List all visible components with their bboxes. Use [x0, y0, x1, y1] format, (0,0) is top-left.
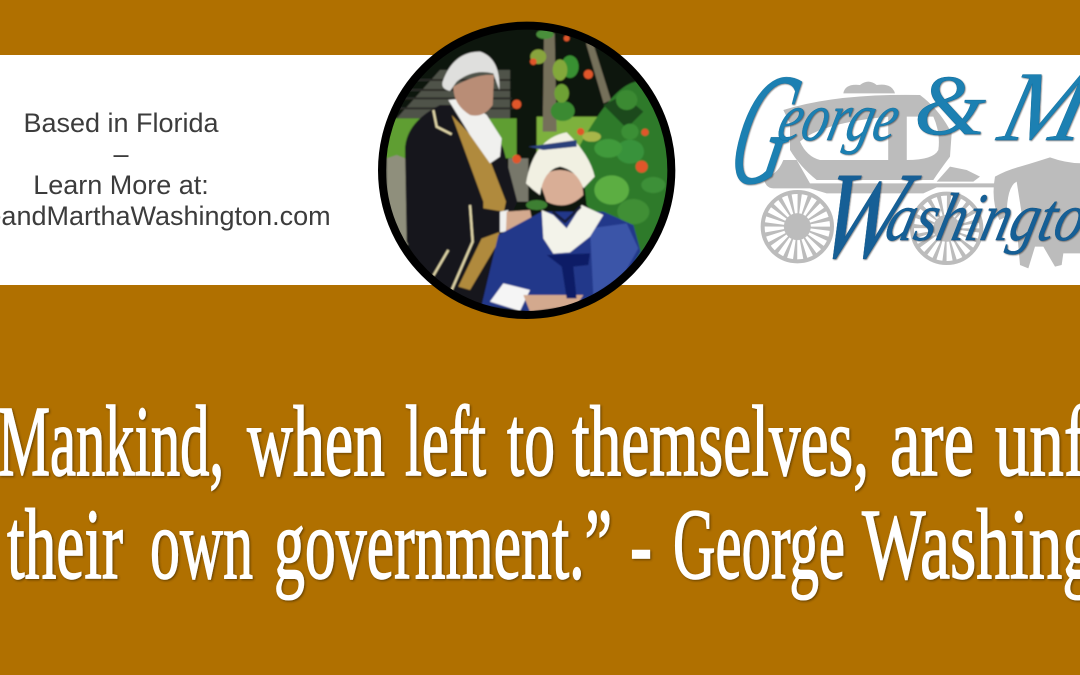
location and website text: Based in Florida: [23, 108, 219, 138]
quote line one: to: [507, 385, 555, 497]
quote line two: George: [673, 488, 845, 600]
logo word: Washington: W: [805, 148, 929, 285]
quote line two: -: [630, 488, 652, 600]
quote line one: left: [405, 385, 486, 497]
horse: [994, 157, 1080, 268]
photo background: [386, 30, 637, 311]
white banner band: [0, 55, 1080, 285]
logo word: George: eorge: [771, 79, 908, 155]
logo word: Washington: [805, 148, 1080, 285]
logo: script name: [715, 41, 1080, 285]
foliage: [526, 30, 670, 262]
carriage wheels: [763, 192, 981, 263]
carriage crown: [843, 82, 895, 93]
figure: Martha: [482, 212, 641, 312]
quote line two: government.”: [274, 488, 612, 600]
carriage scrolls and axle: [763, 160, 995, 193]
figure: George: [405, 105, 517, 312]
carriage body: [783, 95, 952, 180]
location and website text: –: [113, 138, 129, 168]
quote line one: Mankind,: [0, 385, 224, 497]
quote line one: themselves,: [572, 385, 869, 497]
quote line two: own: [150, 488, 253, 600]
logo: carriage and horse: [763, 82, 1080, 268]
quote line one: [0, 385, 1080, 497]
carriage windows: [800, 117, 939, 160]
quote line one: when: [247, 385, 385, 497]
location and website text: Learn More at:: [33, 170, 209, 200]
location and website text: [0, 108, 331, 230]
photo ring: [382, 26, 671, 315]
logo word: George: G: [715, 41, 815, 218]
flowers: [512, 35, 649, 173]
quote: [0, 385, 1080, 600]
quote line two: their: [7, 488, 123, 600]
circular portrait photo: [377, 22, 677, 322]
quote line one: are: [890, 385, 974, 497]
quote line two: [7, 488, 1080, 600]
logo ampersand: &: [914, 57, 986, 153]
